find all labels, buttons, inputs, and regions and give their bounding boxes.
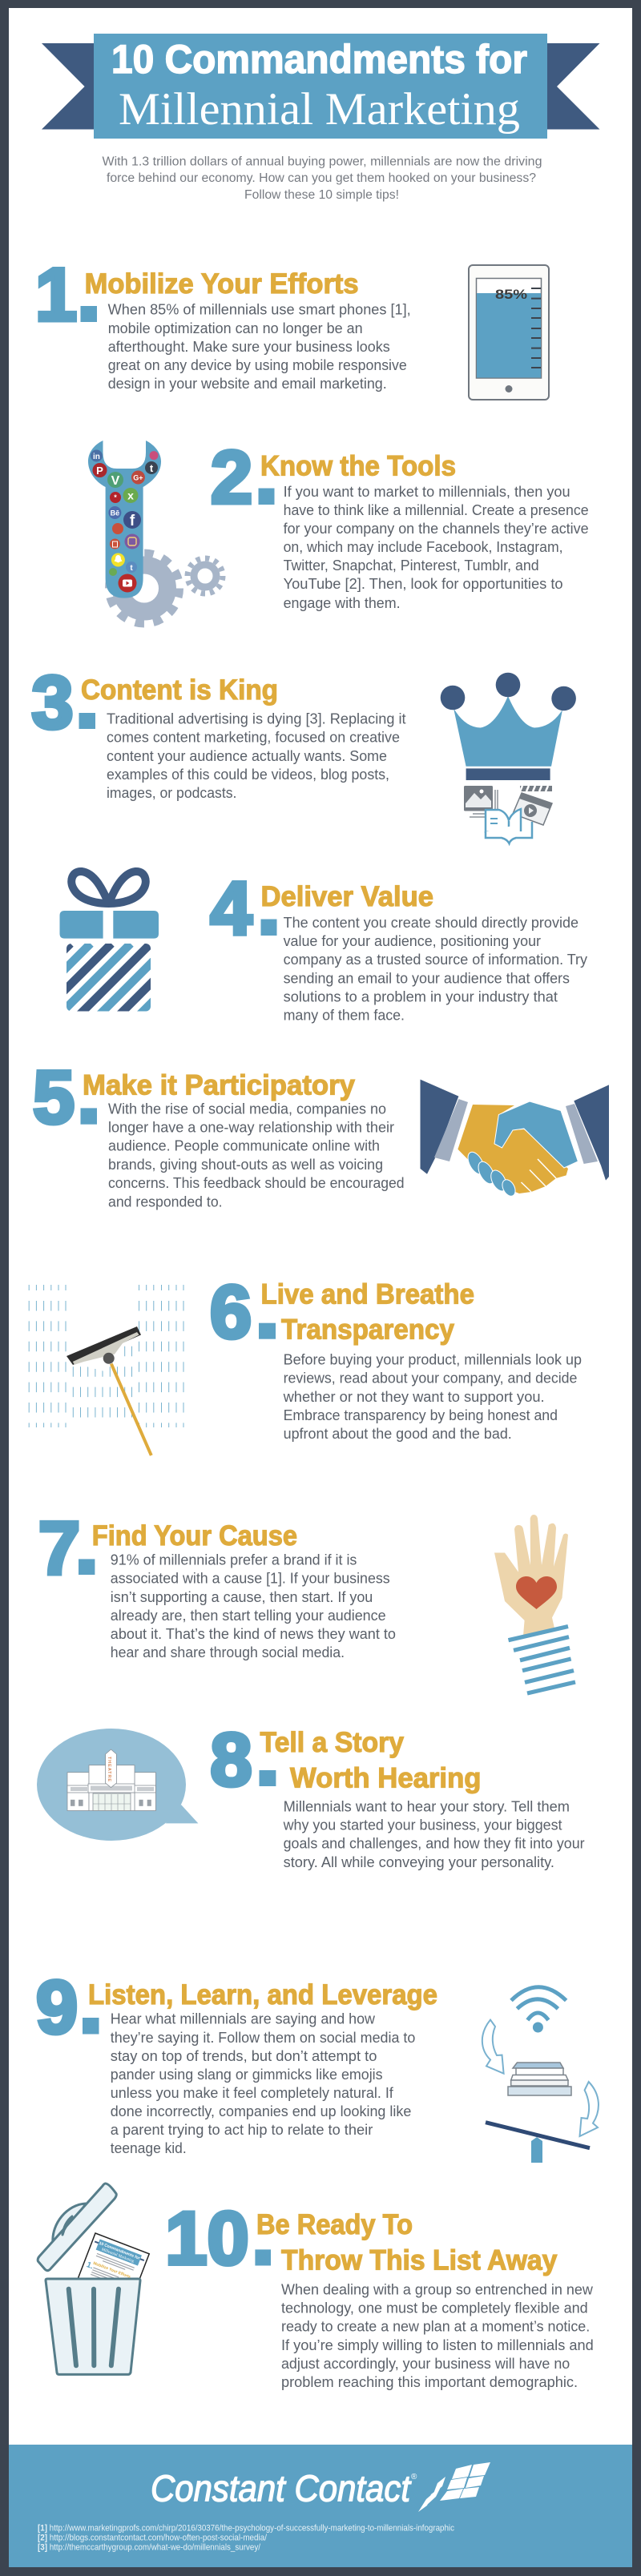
title banner [42, 34, 599, 139]
lid [38, 2184, 116, 2271]
thrown infographic page [69, 2233, 149, 2323]
body 4: The content you create should directly provide [284, 915, 579, 931]
body 9: they’re saying it. Follow them on social media to [111, 2030, 415, 2046]
intro text: With 1.3 trillion dollars of annual buying power, millennials are now the driving [103, 155, 542, 169]
body 2: Twitter, Snapchat, Pinterest, Tumblr, and [284, 557, 539, 574]
body 7: isn’t supporting a cause, then start. If you [111, 1589, 373, 1605]
heading 8 [260, 1727, 481, 1793]
theater sign: THEATRE [107, 1757, 111, 1781]
body 5: With the rise of social media, companies no [108, 1101, 386, 1117]
body 3: examples of this could be videos, blog posts, [107, 767, 389, 783]
body 10: ready to create a new plan at a moment’s notice. [281, 2319, 590, 2335]
large gear [110, 554, 179, 623]
body 4: sending an email to your audience that offers [284, 970, 570, 986]
panel: commandment 7 [38, 1506, 575, 1693]
references: [3] http://themccarthygroup.com/what-we-do/millennials_survey/ [38, 2543, 261, 2553]
thrown infographic page: 1. [85, 2260, 95, 2271]
heading 9: Listen, Learn, and Leverage [88, 1979, 437, 2010]
number 5 [33, 1055, 97, 1139]
body 1: great on any device by using mobile responsive [108, 357, 407, 373]
references: [2] http://blogs.constantcontact.com/how-often-post-social-media/ [38, 2534, 268, 2543]
body 6: whether or not they want to support you. [283, 1389, 545, 1405]
body 5: and responded to. [108, 1193, 223, 1210]
body 3: content your audience actually wants. Some [107, 748, 387, 764]
number 1 [35, 252, 97, 336]
social media icons: in [93, 453, 100, 461]
body 3: comes content marketing, focused on creative [107, 730, 400, 746]
number 10: 10 [165, 2196, 249, 2280]
body 10: adjust accordingly, your business will have no [281, 2356, 570, 2372]
icon: trash can with infographic [38, 2184, 149, 2374]
body 9: Hear what millennials are saying and how [111, 2011, 376, 2027]
arrow right [580, 2082, 599, 2136]
heading 6: Transparency [281, 1314, 455, 1346]
heading 8: Tell a Story [260, 1727, 405, 1758]
can [46, 2279, 140, 2374]
icon: content media [464, 786, 552, 843]
body 4 [284, 915, 587, 1024]
icon: gift box [59, 867, 159, 1011]
body 1 [108, 302, 411, 392]
panel: commandment 6 [29, 1270, 582, 1455]
arrow left [482, 2020, 504, 2074]
number 6 [210, 1270, 276, 1354]
heading 7: Find Your Cause [92, 1520, 297, 1552]
body 10: When dealing with a group so entrenched in new [281, 2281, 594, 2297]
body 5: concerns. This feedback should be encouraged [108, 1175, 405, 1191]
heading 4: Deliver Value [261, 881, 433, 912]
social media icons: x [127, 489, 134, 501]
number 9 [36, 1965, 99, 2049]
number 2: 2 [211, 435, 252, 519]
title line 2: Millennial Marketing [119, 84, 520, 135]
intro text [103, 155, 542, 202]
number 2 [211, 435, 274, 519]
thrown infographic page: Mobilize Your Efforts [92, 2261, 131, 2280]
body 2: YouTube [2]. Then, look for opportunities to [284, 576, 563, 592]
body 5: longer have a one-way relationship with their [108, 1120, 394, 1136]
social media icons: G+ [133, 474, 143, 482]
social media icons: P [96, 465, 103, 477]
body 6: upfront about the good and the bad. [284, 1426, 512, 1442]
body 5: audience. People communicate online with [108, 1138, 380, 1154]
panel: commandment 10 [38, 2184, 594, 2390]
social media icons [91, 450, 159, 593]
number 8 [210, 1717, 276, 1801]
icon: phone at 85 percent: 85% [495, 287, 527, 302]
heading 10: Be Ready To [256, 2209, 413, 2240]
number 3 [31, 660, 95, 744]
panel: commandment 5 [33, 1055, 609, 1210]
water streaks [29, 1285, 183, 1427]
body 6: reviews, read about your company, and decide [284, 1371, 577, 1387]
body 7: already are, then start telling your audience [111, 1608, 386, 1624]
heading 5: Make it Participatory [83, 1070, 356, 1101]
body 10: problem reaching this important demographic. [281, 2374, 578, 2390]
body 9: done incorrectly, companies end up looking like [111, 2103, 411, 2119]
body 9: pander using slang or gimmicks like emojis [111, 2067, 383, 2083]
heading 6: Live and Breathe [261, 1279, 474, 1310]
body 7: associated with a cause [1]. If your business [111, 1571, 390, 1587]
number 5: 5 [33, 1055, 75, 1139]
icon: phone at 85 percent [469, 265, 549, 400]
thrown infographic page: Millennial Marketing [101, 2248, 135, 2264]
references [38, 2523, 454, 2553]
body 8: Millennials want to hear your story. Tell them [284, 1799, 570, 1815]
image stack [464, 786, 498, 817]
thrown infographic page: 10 Commandments for [99, 2241, 140, 2261]
body 1: mobile optimization can no longer be an [108, 320, 363, 336]
title line 1: 10 Commandments for [111, 37, 527, 82]
panel: commandment 3 [31, 660, 576, 843]
body 2: engage with them. [284, 595, 401, 611]
body 6: Embrace transparency by being honest and [284, 1407, 558, 1423]
body 9: unless you make it feel completely natural. If [111, 2085, 394, 2101]
body 8: goals and challenges, and how they fit into your [284, 1836, 585, 1852]
number 7: 7 [38, 1506, 80, 1590]
body 9: stay on top of trends, but don’t attempt to [111, 2048, 377, 2064]
panel: commandment 9 [36, 1965, 599, 2163]
clapperboard [513, 786, 552, 825]
panel: commandment 2 [88, 435, 589, 623]
icon: hand with heart [494, 1515, 575, 1693]
body 10 [281, 2281, 594, 2390]
books [508, 2063, 571, 2095]
lever [531, 2137, 542, 2163]
body 10: technology, one must be completely flexible and [281, 2300, 588, 2316]
body 6: Before buying your product, millennials look up [284, 1352, 582, 1368]
number 1: 1 [35, 252, 77, 336]
body 10: If you’re simply willing to listen to millennials and [281, 2337, 594, 2353]
body 5 [108, 1101, 405, 1210]
icon: handshake [420, 1080, 609, 1198]
number 8: 8 [210, 1717, 252, 1801]
references: [1] http://www.marketingprofs.com/chirp/2016/30376/the-psychology-of-successfully-marketing-to-millennials-infographic [38, 2523, 454, 2533]
body 8 [283, 1799, 585, 1870]
icon: wrench with social media and gears [88, 441, 223, 623]
open book [486, 809, 532, 843]
body 9: a parent trying to act hip to relate to their [111, 2122, 373, 2138]
body 7: about it. That’s the kind of news they want to [111, 1626, 396, 1642]
logo mark [418, 2462, 490, 2512]
heading 10 [256, 2209, 558, 2276]
heading 10: Throw This List Away [281, 2245, 558, 2276]
number 6: 6 [210, 1270, 252, 1354]
body 9: teenage kid. [111, 2140, 187, 2156]
body 3: Traditional advertising is dying [3]. Replacing it [107, 711, 406, 727]
body 9 [111, 2011, 415, 2156]
body 4: value for your audience, positioning your [284, 933, 541, 949]
social media icons: f [130, 513, 135, 529]
body 4: many of them face. [284, 1008, 405, 1024]
heading 2: Know the Tools [260, 450, 456, 481]
panel: commandment 8 [37, 1717, 585, 1870]
logo: Constant Contact: ® [411, 2473, 417, 2481]
icon: wifi, books and lever [482, 1987, 599, 2163]
social media icons: t [130, 564, 133, 573]
social media icons: t [150, 462, 154, 474]
icon: crown [441, 673, 576, 780]
heading 8: Worth Hearing [290, 1762, 481, 1793]
body 5: brands, giving shout-outs as well as voicing [108, 1157, 383, 1173]
wifi [511, 1987, 566, 2033]
body 8: why you started your business, your biggest [283, 1817, 562, 1833]
body 8: story. All while conveying your personality. [284, 1854, 554, 1870]
number 3: 3 [31, 660, 74, 744]
body 7: 91% of millennials prefer a brand if it is [111, 1552, 357, 1568]
body 6 [283, 1352, 582, 1442]
body 1: afterthought. Make sure your business looks [108, 339, 390, 355]
body 4: company as a trusted source of information. Try [284, 952, 587, 968]
icon: speech bubble with theater [37, 1729, 198, 1841]
body 7 [111, 1552, 396, 1660]
logo: Constant Contact: Constant Contact [151, 2468, 412, 2510]
panel: commandment 4 [59, 867, 587, 1024]
panel: footer [9, 2445, 632, 2567]
number 9: 9 [36, 1965, 78, 2049]
heading 6 [261, 1279, 474, 1346]
wrench [88, 441, 161, 598]
body 2: on, which may include Facebook, Instagram, [284, 539, 563, 555]
body 3: images, or podcasts. [107, 785, 236, 801]
body 2 [284, 484, 589, 611]
small gear [187, 558, 223, 594]
icon: squeegee on window [29, 1285, 183, 1455]
intro text: Follow these 10 simple tips! [244, 188, 399, 202]
body 2: have to think like a millennial. Create a presence [284, 502, 589, 518]
wiped glass area [69, 1290, 138, 1371]
body 1: When 85% of millennials use smart phones [1], [108, 302, 411, 318]
body 4: solutions to a problem in your industry that [284, 988, 558, 1004]
body 2: If you want to market to millennials, then you [284, 484, 570, 500]
heading 1: Mobilize Your Efforts [85, 268, 359, 300]
panel: commandment 1 [35, 252, 549, 400]
body 7: hear and share through social media. [111, 1644, 345, 1660]
intro text: force behind our economy. How can you get them hooked on your business? [107, 171, 536, 185]
body 2: for your company on the channels they’re active [284, 521, 589, 537]
body 3 [107, 711, 406, 801]
social media icons: * [114, 493, 117, 501]
heading 3: Content is King [81, 674, 278, 706]
social media icons: V [111, 474, 120, 488]
body 1: design in your website and email marketing. [108, 376, 387, 392]
number 4: 4 [210, 866, 252, 950]
theater building [67, 1749, 155, 1810]
social media icons: Bē [111, 509, 119, 517]
number 4 [210, 866, 277, 950]
